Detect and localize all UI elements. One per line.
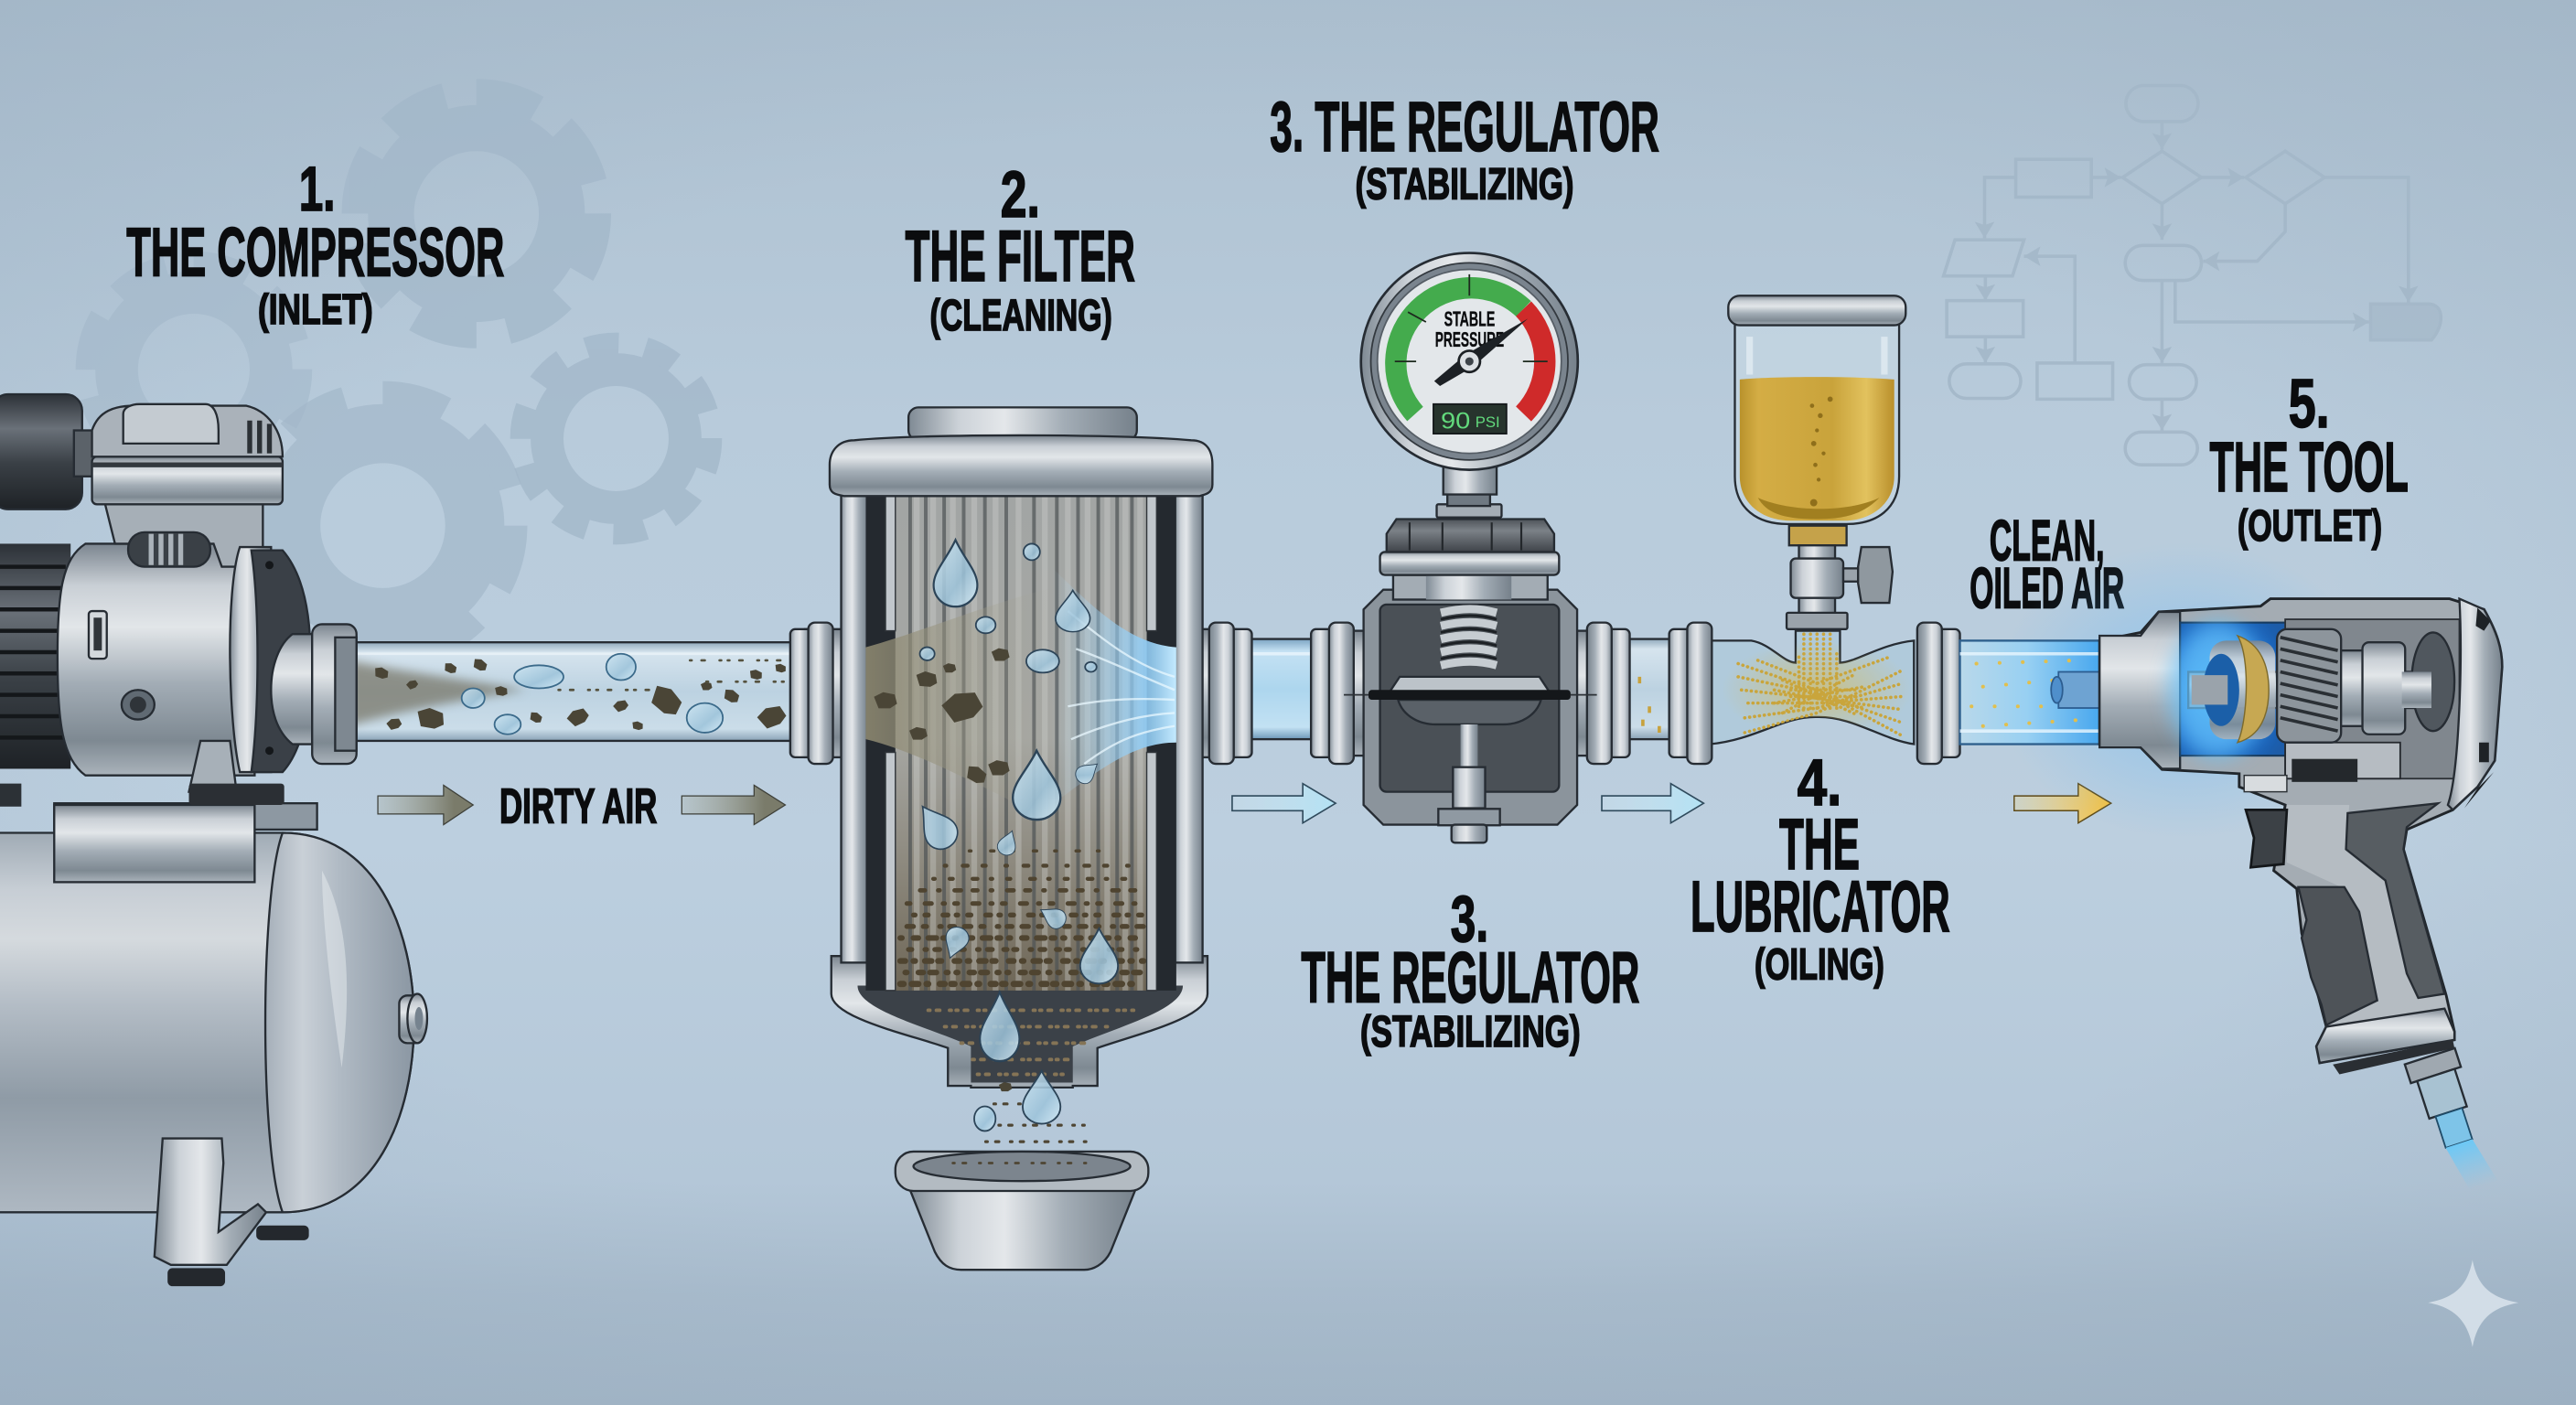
label: clean oiled air (1970, 509, 2124, 620)
sparkle watermark (2428, 1260, 2518, 1347)
filter element (886, 487, 1156, 991)
pump flange (92, 456, 283, 504)
nozzle (2099, 612, 2180, 768)
arrow: dirty air right (682, 785, 785, 825)
bearing (2192, 640, 2275, 739)
valve stem and plug (1438, 724, 1500, 842)
front grip (2298, 887, 2377, 1025)
gauge label (1435, 306, 1504, 351)
oil (1740, 377, 1894, 520)
needle (1434, 318, 1528, 386)
lower mechanism (2244, 743, 2400, 792)
captured dirt (900, 851, 1143, 984)
pump head cover (92, 404, 283, 465)
tool body (2099, 599, 2502, 1063)
dirty air stream (865, 588, 1051, 821)
drive cylinder (2341, 642, 2405, 735)
heading: step 4 the lubricator: 4. (1798, 746, 1841, 820)
bottom bowl (832, 956, 1208, 1088)
outlet nozzle (271, 634, 312, 745)
glass pipe: filter to regulator (1240, 639, 1323, 739)
heading: step 3 the regulator bottom (1301, 883, 1639, 1056)
heading: step 3 the regulator top (1270, 88, 1659, 209)
arrow: clean air after regulator (1602, 784, 1703, 823)
silver flange (1380, 552, 1559, 575)
heading: step 3 the regulator bottom: (STABILIZING) (1360, 1007, 1581, 1056)
arrow: oiled air (2014, 784, 2111, 823)
heading: step 3 the regulator top: 3. THE REGULATOR (1270, 88, 1659, 166)
heading: step 5 the tool: 5. (2289, 365, 2330, 442)
oil cup (1728, 295, 1905, 524)
tank reflection (322, 871, 347, 1067)
oil mist particles (1722, 634, 1912, 739)
regulator (1311, 467, 1630, 842)
internal chamber (1380, 605, 1559, 792)
heading: step 5 the tool (2210, 365, 2409, 551)
adjustment cap (1387, 519, 1554, 552)
pump neck (105, 504, 263, 567)
trigger (2246, 810, 2287, 867)
tank port (399, 993, 427, 1043)
filter droplets (909, 540, 1118, 1131)
background gears (87, 93, 712, 657)
regulator body (1364, 590, 1577, 825)
air fitting (2405, 1048, 2498, 1197)
gold collar (1789, 526, 1847, 545)
rear clip (2464, 607, 2494, 809)
needle valve (1787, 545, 1893, 629)
compressor (0, 394, 357, 882)
impact tool (2099, 599, 2502, 1197)
outlet flange (1189, 623, 1251, 764)
heading: step 4 the lubricator: (OILING) (1755, 939, 1884, 989)
handle highlight (2287, 805, 2452, 1032)
red zone (1524, 309, 1545, 414)
cup lid (1728, 295, 1905, 326)
heading: step 3 the regulator bottom: THE REGULATOR (1301, 936, 1639, 1017)
heading: step 2 the filter (906, 158, 1135, 340)
heading: step 4 the lubricator: THE (1779, 803, 1860, 885)
diaphragm (1344, 677, 1597, 724)
dirty air pipe (349, 642, 800, 741)
gold ring (2238, 636, 2269, 743)
digital display: 90 (1441, 409, 1470, 434)
gold oil dots (1971, 660, 2095, 726)
glass pipe: regulator to lubricator (1618, 639, 1684, 739)
filter (790, 407, 1251, 1142)
falling debris (986, 1082, 1092, 1142)
heading: step 5 the tool: (OUTLET) (2238, 501, 2382, 551)
front housing ring (230, 547, 310, 772)
lubricator (1669, 295, 1960, 764)
spring (1441, 609, 1497, 665)
heading: step 2 the filter: THE FILTER (906, 215, 1135, 296)
mechanism cutaway (2285, 619, 2459, 778)
heading: step 3 the regulator bottom: 3. (1451, 883, 1488, 956)
heading: step 5 the tool: THE TOOL (2210, 428, 2409, 507)
drain collection bowl (896, 1152, 1148, 1270)
green zone (1396, 288, 1524, 414)
gauge stem (1437, 467, 1501, 518)
dirt particles (372, 657, 789, 731)
gauge label: STABLE (1444, 306, 1495, 330)
clean air stream (1051, 567, 1176, 805)
canister walls (842, 487, 1203, 991)
tank (0, 833, 427, 1212)
water droplets (462, 654, 723, 735)
rear grip (2346, 803, 2444, 998)
inlet flange (790, 623, 848, 764)
heading: step 1 the compressor (126, 155, 504, 333)
right flange (1917, 623, 1960, 764)
motor fins (0, 543, 70, 768)
heading: step 1 the compressor: (INLET) (258, 285, 373, 333)
filter lid (830, 407, 1212, 496)
housing details (89, 611, 155, 720)
rear disk (2402, 632, 2454, 731)
outlet flange (312, 624, 357, 764)
anvil (2051, 672, 2099, 708)
rear housing (2448, 599, 2502, 810)
handle base (2316, 1009, 2454, 1063)
digital display: PSI (1476, 414, 1500, 431)
right pipe union (1571, 623, 1630, 764)
heading: step 2 the filter: 2. (1001, 158, 1040, 231)
blue cutaway window (2180, 623, 2292, 756)
heading: step 1 the compressor: 1. (299, 155, 335, 224)
heading: step 3 the regulator top: (STABILIZING) (1356, 159, 1573, 209)
oil bubbles (1810, 397, 1833, 506)
shaft (2188, 672, 2452, 708)
motor housing (58, 543, 254, 776)
heading: step 1 the compressor: THE COMPRESSOR (126, 214, 504, 291)
label: dirty air: DIRTY AIR (499, 779, 657, 834)
arrow: clean air after filter (1232, 784, 1336, 823)
tank feet (155, 1139, 309, 1286)
tank end cap (265, 833, 414, 1212)
heading: step 4 the lubricator (1690, 746, 1950, 989)
heading: step 2 the filter: (CLEANING) (929, 291, 1112, 340)
vent slot (128, 532, 210, 567)
background flowchart (1944, 85, 2441, 465)
mounting plate (0, 784, 317, 882)
helical gear (2277, 629, 2341, 743)
label: clean oiled air: CLEAN, (1990, 509, 2105, 573)
pressure gauge (1361, 253, 1578, 470)
gauge label: PRESSURE (1435, 327, 1504, 351)
glow around tool inlet (1996, 542, 2374, 838)
left flange (1669, 623, 1712, 764)
arrow: dirty air left (378, 785, 473, 825)
stand bracket (189, 741, 284, 805)
heading: step 4 the lubricator: LUBRICATOR (1690, 865, 1950, 947)
venturi tube (1711, 631, 1914, 745)
left pipe union (1311, 623, 1370, 764)
base ring (2333, 1040, 2454, 1074)
clean oiled air pipe (1960, 640, 2108, 745)
blue glow (2169, 621, 2267, 759)
label: clean oiled air: OILED AIR (1970, 556, 2124, 620)
bonnet (1393, 575, 1548, 599)
top cylinder (0, 394, 97, 509)
silver liners (886, 487, 1156, 991)
digital display (1433, 404, 1507, 434)
